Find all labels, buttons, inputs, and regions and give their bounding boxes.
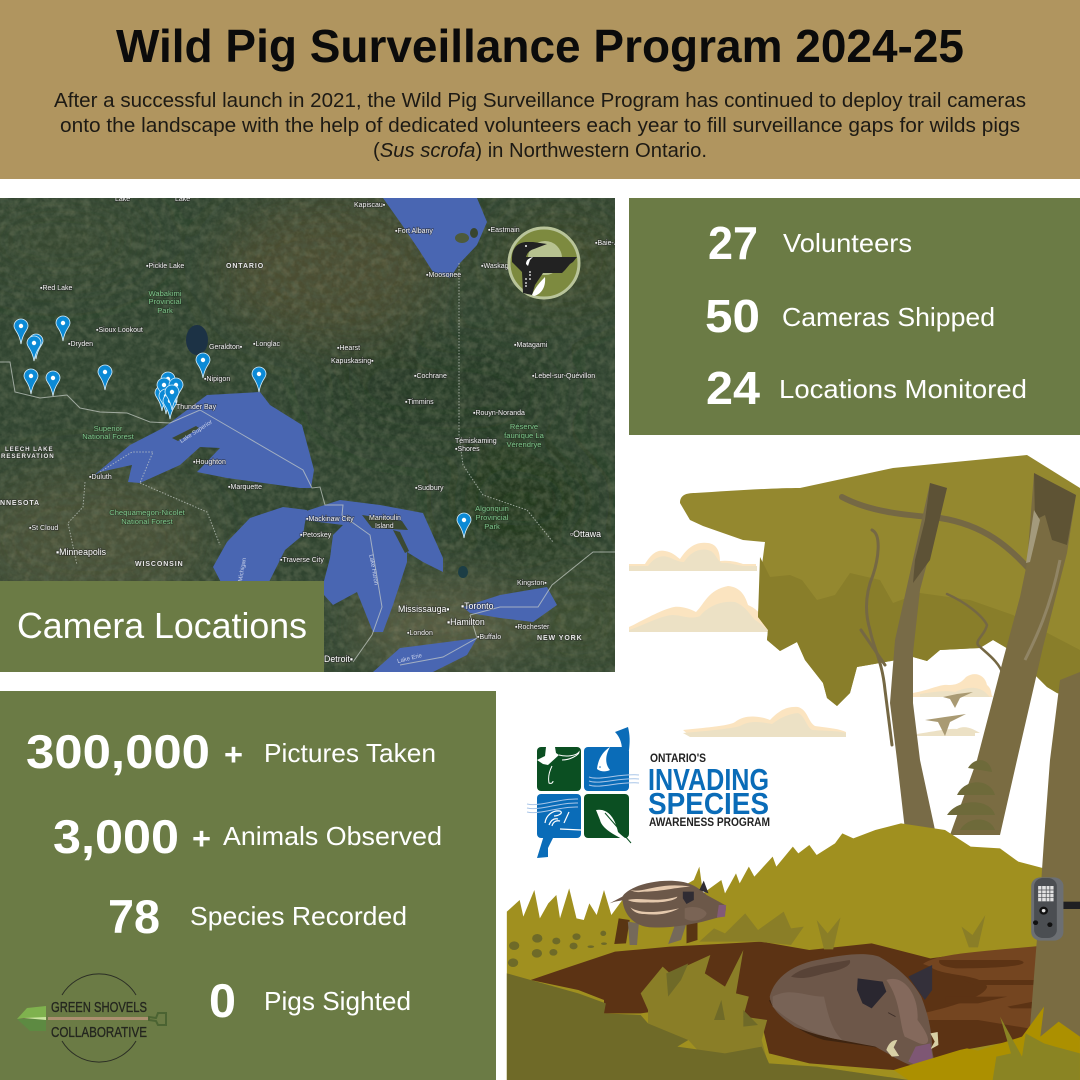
map: place names: ▪Baie-J (595, 240, 617, 247)
map: place names: Témiskaming (455, 438, 497, 445)
map: place names: ▪Cochrane (414, 373, 447, 380)
map: place names: ▪Eastmain (488, 227, 520, 234)
map: place names: Detroit▪ (324, 654, 353, 664)
stat: animals observed: Animals Observed (223, 821, 442, 851)
map: place names: Geraldton▪ (209, 344, 243, 351)
icon: loon logo (509, 228, 579, 298)
map: place names: Kapuskasing▪ (331, 358, 374, 365)
grassy hill (507, 823, 1080, 1080)
intro paragraph: (Sus scrofa) in Northwestern Ontario. (373, 140, 707, 162)
stat: locations monitored (706, 362, 1027, 414)
map: place names: Vérendrye (506, 440, 542, 449)
map: place names: ▪Duluth (89, 474, 112, 481)
stat: pictures taken: Pictures Taken (264, 738, 436, 768)
map: place names (0, 196, 617, 665)
logo: ontario's invading species awareness program: INVADING (648, 762, 769, 797)
stat: cameras shipped: Cameras Shipped (782, 302, 995, 332)
intro paragraph: After a successful launch in 2021, the Wild Pig Surveillance Program has continued to deploy trail cameras (54, 90, 1026, 112)
map: place names: ▪Red Lake (40, 285, 73, 292)
foreground yellow grass (894, 1007, 1080, 1080)
foreground bank (507, 973, 908, 1080)
sleeping wild pig (769, 954, 938, 1067)
map: place names: ▪Hamilton (447, 617, 485, 627)
intro paragraph (54, 90, 1026, 162)
map: place names: ▪Nipigon (204, 376, 230, 383)
stat: species recorded: Species Recorded (190, 901, 407, 931)
panel: camera locations map (0, 196, 640, 672)
map: place names: RESERVATION (1, 453, 55, 460)
map: place names: ▪Sudbury (415, 485, 444, 492)
stat: cameras shipped: 50 (705, 290, 760, 342)
illustration: forest scene with wild pigs and trail camera (507, 455, 1080, 1080)
map: place names: ▪Waskaga (481, 263, 513, 270)
logo: ontario's invading species awareness program: AWARENESS PROGRAM (649, 815, 770, 829)
stat: volunteers (708, 217, 912, 269)
stat: animals observed (53, 810, 442, 863)
map: place names: NEW YORK (537, 635, 583, 642)
tree canopy upper (680, 455, 1080, 706)
map: place names: Superior (94, 424, 123, 433)
grass tuft in mud (640, 950, 768, 1057)
map: place names: ▪Lebel-sur-Quévillon (532, 373, 595, 380)
small grass tufts (699, 912, 985, 949)
stat: volunteers: Volunteers (783, 228, 912, 258)
ground layers and animals (507, 823, 1080, 1080)
map: place names: Park (157, 306, 173, 315)
map: place names: faunique La (504, 431, 545, 440)
map: place names: ▪Pickle Lake (146, 263, 184, 270)
map: place names: ▪Matagami (514, 342, 548, 349)
map: place names: Mississauga▪ (398, 604, 450, 614)
mud wallow (531, 942, 1039, 1070)
map: place names: National Forest (82, 432, 135, 441)
map label: camera locations (0, 581, 324, 672)
stat: pictures taken: + (224, 737, 243, 772)
map: place names: Park (484, 522, 500, 531)
map: place names: Réserve (510, 422, 538, 431)
tree branches (842, 497, 1030, 745)
map: place names: ▪Hearst (337, 345, 360, 352)
map: place names: ▪Mackinaw City (306, 516, 354, 523)
map: place names: Wabakimi (148, 289, 182, 298)
stat: pictures taken (26, 725, 436, 778)
stat: animals observed: + (192, 821, 211, 856)
map: place names: Michigan (238, 557, 248, 582)
stat: locations monitored: Locations Monitored (779, 374, 1027, 404)
map: place names: ▪Sioux Lookout (96, 327, 143, 334)
map: place names: ▪Moosonee (426, 272, 461, 279)
header banner (0, 0, 1080, 179)
map: place names: Manitoulin (369, 515, 401, 522)
stat: cameras shipped (705, 290, 995, 342)
map: place names: ▪Marquette (228, 484, 262, 491)
logo: ontario's invading species awareness program (527, 727, 770, 858)
map: place names: ▪Longlac (253, 341, 281, 348)
map: place names: ▪Shores (455, 446, 480, 453)
map: place names: Island (375, 523, 394, 530)
stat: pigs sighted (209, 974, 411, 1027)
hoof prints (508, 931, 607, 967)
map: place names: LEECH LAKE (5, 446, 54, 453)
map: place names: ▪Rouyn-Noranda (473, 410, 525, 417)
logo: ontario's invading species awareness program: ONTARIO'S (650, 751, 706, 765)
map: place names: ▪St Cloud (29, 525, 58, 532)
front tree trunk (1029, 672, 1080, 1040)
map: place names: Provincial (149, 297, 182, 306)
map: place names: Lake (115, 196, 130, 203)
stat: species recorded (108, 890, 407, 943)
map: place names: ▪Toronto (461, 601, 494, 611)
map: place names: ▪Petoskey (300, 532, 332, 539)
piglet (610, 881, 726, 945)
map: camera location pins (14, 316, 471, 538)
map: place names: Chequamegon-Nicolet (109, 508, 186, 517)
panel: volunteer and camera stats (629, 198, 1080, 435)
logo: ontario's invading species awareness program: SPECIES (648, 786, 769, 821)
map: place names: Lake Superior (179, 419, 214, 445)
map: place names: ▪Minneapolis (56, 547, 107, 557)
map: place names: Lake Erie (397, 653, 423, 665)
title: Wild Pig Surveillance Program 2024-25 (116, 20, 964, 72)
map: place names: Lake (175, 196, 190, 203)
map: place names: ▪London (407, 630, 433, 637)
intro paragraph: onto the landscape with the help of dedicated volunteers each year to fill surveillance gaps for wilds pigs (60, 115, 1020, 137)
map terrain (0, 198, 640, 672)
map: place names: ▪Fort Albany (395, 228, 433, 235)
map: place names: National Forest (121, 517, 174, 526)
map: place names: ▪Timmins (405, 399, 434, 406)
map: place names: Kingston▪ (517, 580, 547, 587)
map: place names: ONTARIO (226, 263, 264, 270)
map: great lakes and hudson bay (92, 198, 557, 672)
map: place names: ▪Houghton (193, 459, 226, 466)
map: place names: WISCONSIN (135, 561, 184, 568)
stat: pigs sighted: Pigs Sighted (264, 986, 411, 1016)
map: place names: ▪Dryden (68, 341, 93, 348)
tree canopy lower shade (758, 557, 1080, 706)
map: place names: ▪Buffalo (477, 634, 501, 641)
logo: green shovels collaborative: GREEN SHOVELS (51, 999, 147, 1016)
map: borders (0, 263, 615, 665)
stat: volunteers: 27 (708, 217, 758, 269)
stat: species recorded: 78 (108, 890, 160, 943)
map: place names: Lake Huron (367, 554, 379, 586)
map: place names: Provincial (476, 513, 509, 522)
map: place names: Kapiscau▪ (354, 202, 386, 209)
map: place names: ▫Ottawa (570, 529, 601, 539)
map: place names: ▪Traverse City (280, 557, 324, 564)
map: place names: Algonquin (475, 504, 509, 513)
map label: camera locations: Camera Locations (17, 605, 307, 646)
icon: trail camera (1031, 877, 1080, 941)
stat: locations monitored: 24 (706, 362, 760, 414)
stat: pictures taken: 300,000 (26, 725, 210, 778)
map: place names: NNESOTA (0, 500, 40, 507)
stat: animals observed: 3,000 (53, 810, 179, 863)
clouds (629, 543, 993, 737)
panel: survey result stats (0, 691, 496, 1080)
back tree trunks (890, 473, 1076, 835)
map: place names: Thunder Bay (176, 404, 217, 411)
logo: green shovels collaborative: COLLABORATIVE (51, 1024, 147, 1041)
map: place names: ▪Rochester (515, 624, 550, 631)
bracket fungi (947, 760, 995, 830)
geese (925, 692, 973, 736)
logo: green shovels collaborative (17, 974, 166, 1062)
stat: pigs sighted: 0 (209, 974, 236, 1027)
